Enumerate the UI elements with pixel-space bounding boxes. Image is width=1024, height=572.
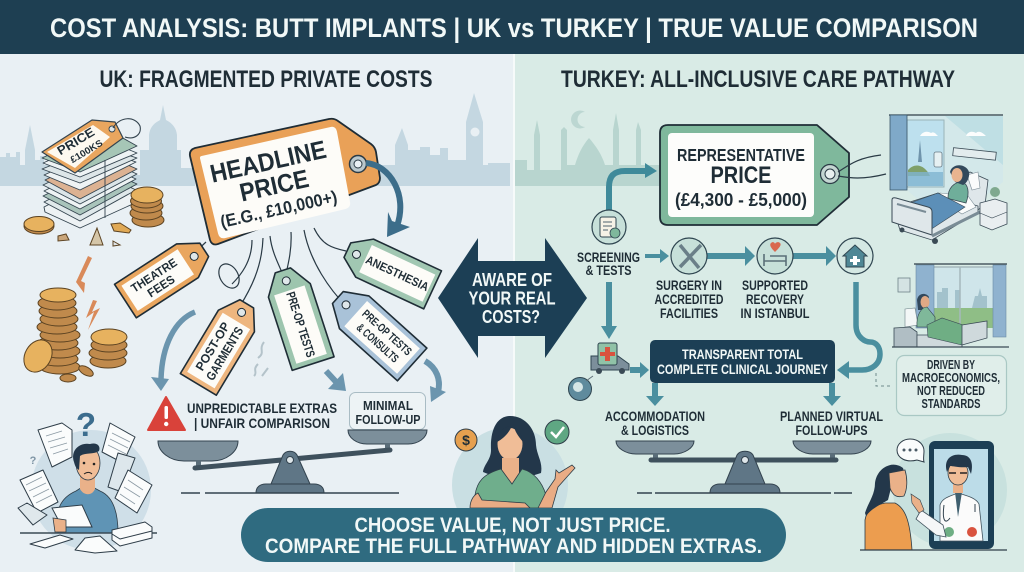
- check bubble: [545, 420, 569, 444]
- scale: UK tilted: [158, 392, 427, 493]
- illustration: second hospital room: [892, 264, 1009, 347]
- minimal follow-up box: FOLLOW-UP: [356, 412, 421, 427]
- callout: macroeconomics: STANDARDS: [922, 397, 980, 411]
- minimal follow-up box: MINIMAL: [363, 398, 413, 413]
- headline tag strings: [190, 228, 347, 307]
- labels: accommodation and follow-ups: & LOGISTICS: [621, 422, 689, 438]
- illustration: confused man with papers: ?: [30, 455, 37, 467]
- tag: representative price: PRICE: [710, 162, 772, 189]
- callout: macroeconomics: DRIVEN BY: [927, 358, 975, 372]
- crescent moon: [571, 111, 585, 129]
- tag: representative price: (£4,300 - £5,000): [675, 190, 807, 210]
- step: surgery: SURGERY IN: [656, 278, 722, 293]
- dollar bubble: $: [462, 432, 470, 448]
- tablet with doctor: [929, 441, 994, 549]
- callout: macroeconomics: NOT REDUCED: [917, 384, 985, 398]
- center arrow callout: AWARE OF: [472, 270, 552, 290]
- arrow: transport to total box: [630, 362, 649, 378]
- icon: globe: [568, 376, 593, 400]
- speech bubble: [897, 439, 924, 462]
- lightning marks: [76, 256, 100, 330]
- left coin stacks: [18, 288, 127, 382]
- tag: theatre fees: FEES: [145, 272, 177, 300]
- tag: pre-op tests and consults: PRE-OP TESTS: [359, 308, 414, 359]
- step: supported recovery: IN ISTANBUL: [740, 306, 810, 321]
- arrow: screening down to transport: [601, 282, 617, 339]
- Turkey skyline: [515, 113, 660, 186]
- labels: accommodation and follow-ups: ACCOMMODATION: [605, 408, 705, 424]
- arrows: total box down: [646, 383, 841, 406]
- table papers: [30, 522, 152, 553]
- arrow: right curve to follow-up: [425, 361, 446, 402]
- warning text: UNPREDICTABLE EXTRAS: [187, 400, 337, 416]
- box: transparent total: [650, 340, 835, 383]
- price tag on stack: PRICE: [55, 125, 97, 158]
- center arrow callout: COSTS?: [482, 307, 540, 327]
- step: supported recovery: [740, 238, 810, 321]
- panel: UK side: [0, 54, 513, 572]
- icon: ambulance: [591, 343, 629, 374]
- warning text: | UNFAIR COMPARISON: [194, 415, 330, 431]
- step: surgery: FACILITIES: [660, 306, 718, 321]
- step: surgery: [654, 238, 724, 321]
- price tag on stack: [42, 119, 140, 173]
- step: surgery: ACCREDITED: [654, 292, 724, 307]
- icon: warning triangle: [148, 397, 185, 430]
- tag: theatre fees: THEATRE: [128, 255, 180, 295]
- labels: accommodation and follow-ups: [605, 408, 883, 438]
- box: transparent total: TRANSPARENT TOTAL: [682, 346, 803, 362]
- panel: Turkey side: [515, 54, 1024, 572]
- step: screening and tests: SCREENING: [577, 250, 640, 265]
- illustration: confused man with papers: [18, 406, 157, 553]
- center arrow callout: [438, 238, 587, 358]
- box: transparent total: COMPLETE CLINICAL JOURNEY: [657, 361, 829, 377]
- illustration: virtual consult: [860, 433, 1007, 550]
- title bar: [0, 0, 1024, 54]
- tag: anesthesia: [339, 231, 441, 309]
- patient: [948, 182, 968, 203]
- tag: anesthesia: ANESTHESIA: [363, 253, 431, 294]
- tag: post-op garments: POST-OP: [193, 320, 233, 373]
- tag: pre-op tests and consults: [323, 281, 427, 381]
- dotted connector: [876, 373, 893, 386]
- step: supported recovery: RECOVERY: [746, 292, 804, 307]
- nightstand: [980, 199, 1007, 230]
- tag: theatre fees: [115, 233, 215, 318]
- illustration: central woman: [452, 416, 575, 543]
- scale: Turkey balanced: [616, 441, 871, 493]
- step: supported recovery: SUPPORTED: [742, 278, 808, 293]
- tag: representative price: [660, 125, 886, 225]
- callout: macroeconomics: [896, 356, 1006, 416]
- step: home: [837, 238, 873, 274]
- arrow: screening up to price: [609, 163, 657, 211]
- doctor arm: [916, 510, 946, 537]
- heading: UK: UK: FRAGMENTED PRIVATE COSTS: [100, 66, 432, 93]
- faint squiggle marks: [254, 342, 268, 376]
- tag: pre-op tests and consults: & CONSULTS: [354, 322, 401, 366]
- loose coins and debris: [24, 216, 131, 246]
- warning text: [187, 400, 337, 431]
- patient woman: [865, 503, 912, 550]
- tag: pre-op tests: PRE-OP TESTS: [283, 290, 318, 359]
- labels: accommodation and follow-ups: FOLLOW-UPS: [796, 422, 868, 438]
- tag: headline price: (E.G., £10,000+): [218, 187, 339, 232]
- arrow: home pipe to total box: [837, 282, 880, 379]
- man: [57, 484, 118, 533]
- bottom banner: COMPARE THE FULL PATHWAY AND HIDDEN EXTRAS.: [265, 535, 762, 558]
- bed: [952, 172, 988, 222]
- step: screening and tests: & TESTS: [586, 263, 632, 278]
- tag: headline price: [190, 119, 380, 244]
- bottom banner: CHOOSE VALUE, NOT JUST PRICE.: [354, 514, 670, 537]
- arrows: pathway row: [645, 246, 836, 266]
- arrow: left down to warning: [151, 312, 195, 391]
- arrow: small down right: [326, 371, 346, 391]
- tag: pre-op tests: [262, 264, 334, 370]
- tag: post-op garments: [180, 293, 265, 395]
- divider strip: [513, 54, 515, 572]
- price tag on stack: £100KS: [68, 138, 105, 166]
- coin stack top: [130, 187, 164, 227]
- paper stack with price tag: [42, 119, 140, 228]
- tag: post-op garments: GARMENTS: [203, 324, 246, 383]
- tag: headline price: PRICE: [237, 165, 311, 207]
- bottom banner: [241, 508, 786, 562]
- arrow: headline tag to anesthesia: [366, 163, 410, 237]
- UK skyline: [0, 93, 510, 186]
- step: screening and tests: [577, 210, 640, 278]
- floating papers: [18, 423, 152, 525]
- illustration: hospital room: [889, 115, 1007, 244]
- question marks: ?: [76, 406, 96, 443]
- center arrow callout: YOUR REAL: [468, 288, 556, 308]
- tag: representative price: REPRESENTATIVE: [677, 145, 805, 165]
- labels: accommodation and follow-ups: PLANNED VIRTUAL: [780, 408, 883, 424]
- tag: headline price: HEADLINE: [208, 136, 329, 189]
- minimal follow-up box: [350, 392, 426, 430]
